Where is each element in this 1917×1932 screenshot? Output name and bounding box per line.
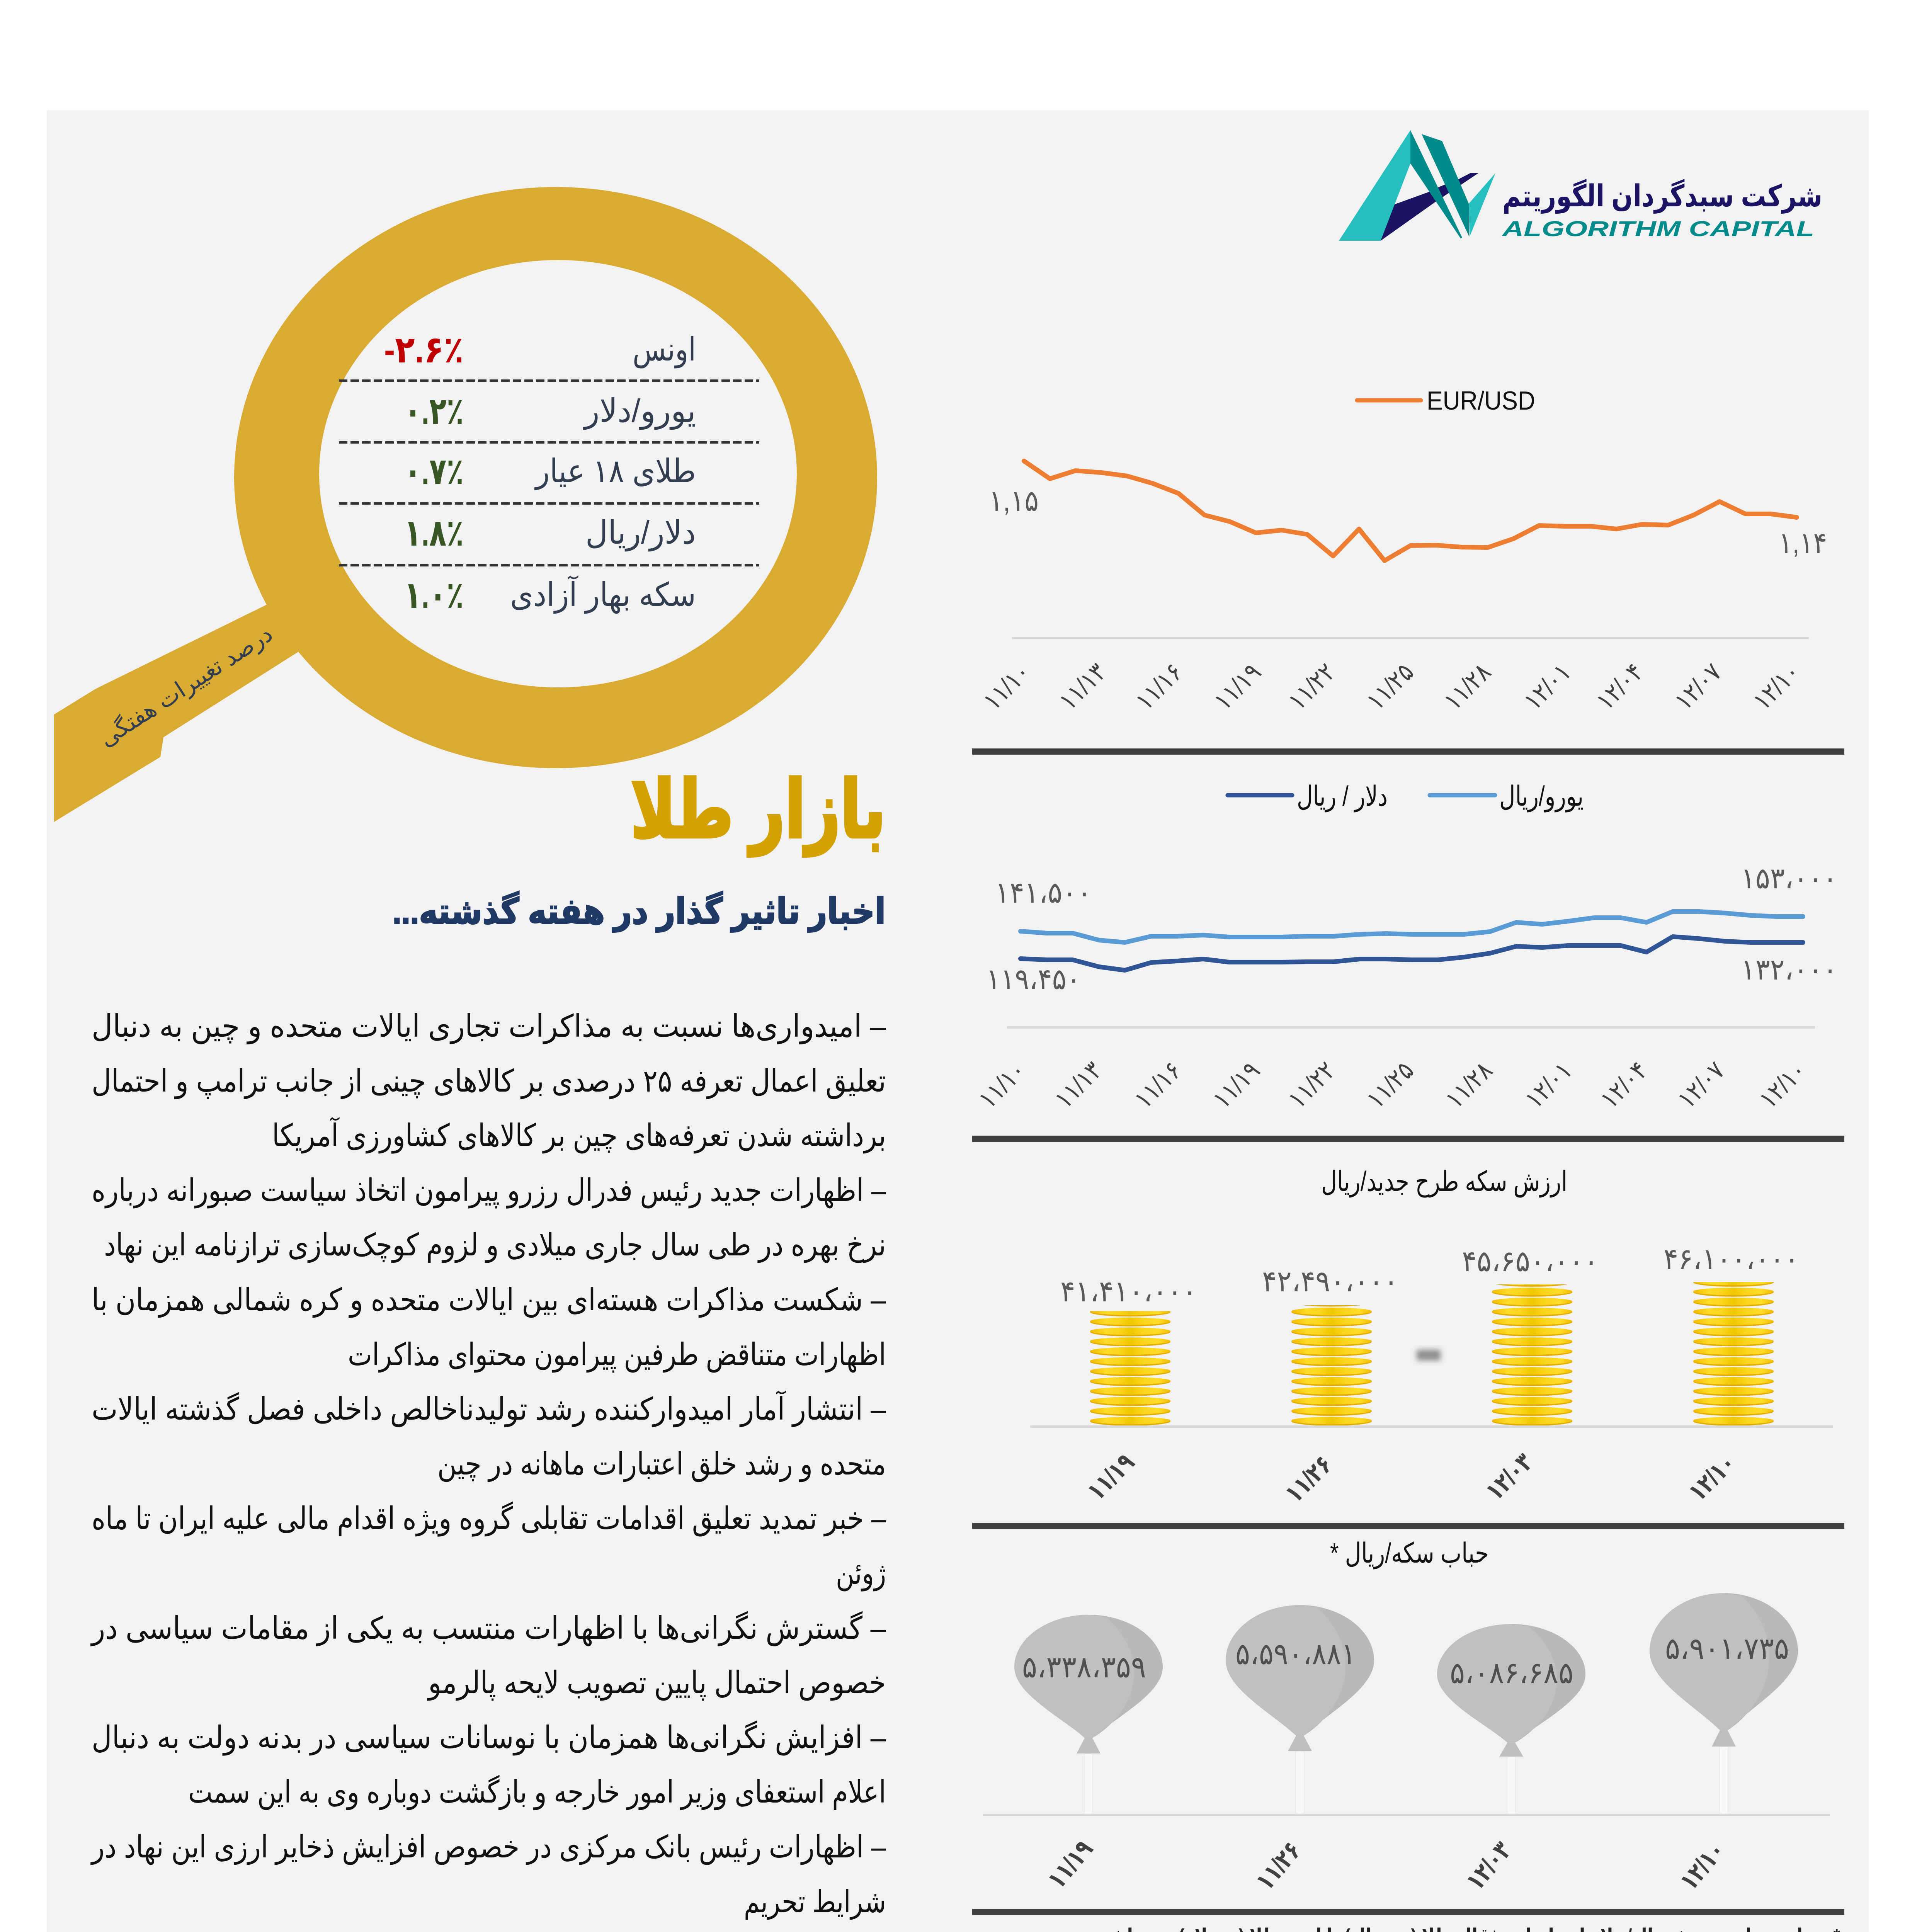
x axis labels: ۱۱/۱۳	[1049, 1056, 1107, 1114]
x axis labels: ۱۲/۱۰	[1674, 1836, 1730, 1895]
x axis labels: ۱۱/۲۵	[1361, 1056, 1419, 1114]
news text block: تعلیق اعمال تعرفه ۲۵ درصدی بر کالاهای چینی از جانب ترامپ و احتمال	[92, 1064, 886, 1099]
x axis labels: ۱۱/۲۶	[1279, 1450, 1337, 1508]
x axis labels: ۱۲/۰۳	[1480, 1447, 1538, 1505]
news text block: اعلام استعفای وزیر امور خارجه و بازگشت دوباره وی به این سمت	[188, 1775, 886, 1810]
x axis labels: ۱۲/۰۳	[1461, 1836, 1517, 1895]
handle text: درصد تغییرات هفتگی	[94, 621, 277, 752]
news text block: – گسترش نگرانی‌ها با اظهارات منتسب به یکی از مقامات سیاسی در	[90, 1611, 886, 1646]
logo: Algorithm Capital	[1339, 130, 1822, 241]
news text block: نرخ بهره در طی سال جاری میلادی و لزوم کوچک‌سازی ترازنامه این نهاد	[104, 1228, 886, 1263]
value labels: ۱۵۳،۰۰۰	[1741, 862, 1837, 895]
news text block: – اظهارات رئیس بانک مرکزی در خصوص افزایش ذخایر ارزی این نهاد در	[90, 1830, 886, 1865]
balloon 1: ۵،۳۳۸،۳۵۹	[1022, 1650, 1146, 1684]
x axis labels: ۱۲/۱۰	[1683, 1448, 1741, 1506]
magnifier handle	[54, 595, 305, 822]
row: dollar/rial	[404, 512, 696, 554]
chart: dollar/rial and euro/rial	[973, 781, 1837, 1114]
x axis labels: ۱۲/۰۷	[1672, 1056, 1730, 1114]
x axis labels: ۱۱/۲۵	[1361, 657, 1419, 715]
x axis labels: ۱۲/۰۱	[1518, 657, 1576, 715]
x axis labels	[973, 1056, 1812, 1114]
row: euro/dollar: یورو/دلار	[583, 393, 696, 430]
row: euro/dollar: ۰.۲٪	[404, 391, 464, 432]
news text block: – خبر تمدید تعلیق اقدامات تقابلی گروه ویژه اقدام مالی علیه ایران تا ماه	[92, 1501, 886, 1537]
x axis labels: ۱۱/۱۰	[973, 1056, 1031, 1114]
news text block: – انتشار آمار امیدوارکننده رشد تولیدناخالص داخلی فصل گذشته ایالات	[92, 1390, 886, 1427]
x axis labels: ۱۱/۱۹	[1207, 1056, 1265, 1114]
x axis labels: ۱۱/۱۶	[1129, 1056, 1187, 1114]
x axis labels: ۱۲/۰۴	[1590, 657, 1648, 715]
chart title: حباب سکه/ریال *	[1330, 1538, 1489, 1570]
line series: dollar/rial	[1021, 937, 1803, 970]
value labels: ۱۴۱،۵۰۰	[995, 876, 1092, 909]
x axis labels	[978, 657, 1805, 715]
value labels	[986, 862, 1837, 996]
row: 18k gold: ۰.۷٪	[404, 451, 464, 492]
x axis labels: ۱۱/۲۲	[1283, 657, 1340, 715]
row: ounce: -۲.۶٪	[384, 329, 464, 371]
news text block: اظهارات متناقض طرفین پیرامون محتوای مذاکرات	[348, 1337, 886, 1373]
balloon 1	[1014, 1615, 1163, 1814]
coin stacks	[1090, 1282, 1774, 1426]
legend	[1228, 781, 1584, 813]
row: 18k gold: طلای ۱۸ عیار	[534, 453, 696, 490]
value labels: ۱,۱۵	[989, 485, 1039, 517]
x axis labels: ۱۱/۱۰	[978, 657, 1036, 715]
magnifier ring	[234, 187, 877, 768]
chart: coin bubble balloons	[983, 1538, 1830, 1895]
value labels: ۴۵،۶۵۰،۰۰۰	[1462, 1245, 1599, 1278]
value labels	[989, 485, 1827, 560]
chart: EUR/USD	[978, 386, 1827, 715]
x axis labels: ۱۱/۲۸	[1440, 1056, 1498, 1114]
subtitle: اخبار تاثیر گذار در هفته گذشته...	[393, 891, 886, 932]
news text block: ژوئن	[836, 1556, 886, 1592]
row: dollar/rial: ۱.۸٪	[404, 512, 464, 554]
x axis labels: ۱۱/۲۶	[1250, 1836, 1306, 1895]
x axis labels: ۱۲/۱۰	[1747, 657, 1805, 715]
news text block: متحده و رشد خلق اعتبارات ماهانه در چین	[437, 1447, 886, 1482]
x axis labels: ۱۱/۲۲	[1283, 1056, 1340, 1114]
news text block: – شکست مذاکرات هسته‌ای بین ایالات متحده و کره شمالی همزمان با	[92, 1282, 886, 1318]
balloon 4: ۵،۹۰۱،۷۳۵	[1665, 1631, 1789, 1665]
row: ounce: اونس	[633, 331, 696, 369]
chart: new-design coin value	[1030, 1166, 1833, 1508]
chart title: ارزش سکه طرح جدید/ریال	[1321, 1166, 1567, 1198]
magnifier: weekly change table	[54, 187, 877, 822]
x axis labels: ۱۱/۱۹	[1042, 1835, 1098, 1894]
news text block: – افزایش نگرانی‌ها همزمان با نوسانات سیاسی در بدنه دولت به دنبال	[92, 1720, 886, 1756]
x axis labels: ۱۲/۰۷	[1669, 657, 1727, 715]
x axis labels: ۱۲/۰۱	[1519, 1056, 1577, 1114]
value labels: ۱,۱۴	[1779, 527, 1827, 560]
blurred mark	[1417, 1350, 1441, 1361]
legend: EUR/USD	[1427, 386, 1535, 415]
row: 18k gold	[404, 451, 696, 492]
row: euro/dollar	[404, 391, 696, 432]
value labels	[1060, 1243, 1799, 1308]
x axis labels: ۱۱/۱۹	[1082, 1447, 1140, 1505]
legend: یورو/ریال	[1499, 781, 1584, 813]
balloon 3	[1437, 1624, 1585, 1814]
value labels: ۴۱،۴۱۰،۰۰۰	[1060, 1275, 1197, 1308]
row: coin	[404, 575, 696, 616]
x axis labels: ۱۲/۰۴	[1595, 1056, 1653, 1114]
x axis labels: ۱۲/۱۰	[1754, 1056, 1812, 1114]
x axis labels	[1042, 1835, 1730, 1895]
news text block: خصوص احتمال پایین تصویب لایحه پالرمو	[427, 1665, 886, 1701]
line series	[1024, 461, 1797, 561]
value labels: ۱۳۲،۰۰۰	[1741, 953, 1837, 986]
news text block: شرایط تحریم	[744, 1884, 886, 1920]
logo: Algorithm Capital: شرکت سبدگردان الگوریتم	[1502, 179, 1822, 214]
x axis labels: ۱۱/۲۸	[1438, 657, 1496, 715]
x axis labels: ۱۱/۱۹	[1208, 657, 1266, 715]
x axis labels	[1082, 1447, 1741, 1508]
balloon 3: ۵،۰۸۶،۶۸۵	[1450, 1656, 1573, 1690]
news text block: برداشته شدن تعرفه‌های چین بر کالاهای کشاورزی آمریکا	[272, 1117, 886, 1154]
news text block	[90, 1009, 886, 1920]
row: coin: ۱.۰٪	[404, 575, 464, 616]
balloon 2	[1226, 1605, 1374, 1814]
line series: euro/rial	[1021, 912, 1803, 942]
value labels: ۴۲،۴۹۰،۰۰۰	[1262, 1265, 1398, 1298]
value labels: ۴۶،۱۰۰،۰۰۰	[1664, 1243, 1799, 1276]
title: بازار طلا	[631, 765, 886, 856]
row: dollar/rial: دلار/ریال	[585, 514, 696, 552]
row: ounce	[384, 329, 696, 371]
value labels: ۱۱۹،۴۵۰	[986, 963, 1081, 996]
x axis labels: ۱۱/۱۶	[1130, 657, 1188, 715]
legend: دلار / ریال	[1297, 781, 1388, 813]
row: coin: سکه بهار آزادی	[510, 575, 696, 614]
balloon 4	[1650, 1593, 1798, 1814]
x axis labels: ۱۱/۱۳	[1053, 657, 1111, 715]
logo: Algorithm Capital: ALGORITHM CAPITAL	[1501, 216, 1814, 241]
news text block: – امیدواری‌ها نسبت به مذاکرات تجاری ایالات متحده و چین به دنبال	[92, 1009, 886, 1044]
news text block: – اظهارات جدید رئیس فدرال رزرو پیرامون اتخاذ سیاست صبورانه درباره	[92, 1173, 886, 1209]
balloon 2: ۵،۵۹۰،۸۸۱	[1235, 1637, 1356, 1671]
